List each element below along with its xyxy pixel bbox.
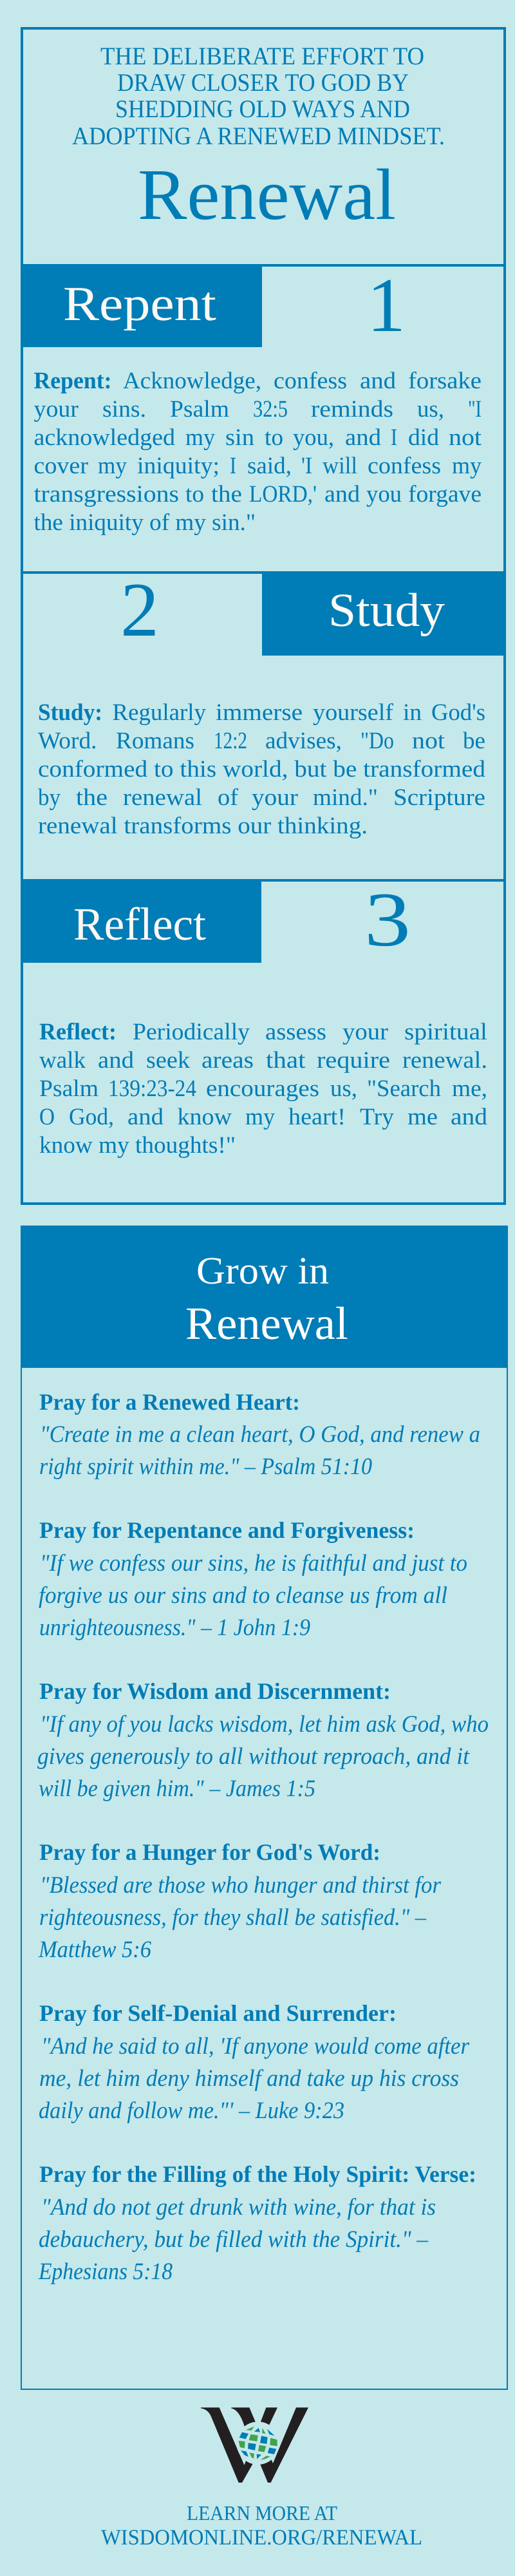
text block: study: in — [403, 699, 422, 726]
prayer: renewed heart: "Create in me a clean heart, O God, and renew a — [40, 1421, 480, 1448]
text block: study — [38, 699, 486, 839]
text block: repent: iniquity; — [137, 453, 220, 479]
prayer: filling of the holy spirit: "And do not get drunk with wine, for that is — [41, 2194, 436, 2221]
text block: reflect: Reflect: — [39, 1019, 117, 1045]
text block: study: immerse — [216, 699, 303, 726]
text block: repent: cover — [33, 453, 88, 479]
text block: study: your — [252, 784, 298, 811]
text block: study: not — [412, 728, 445, 754]
text block: reflect: me, — [452, 1075, 487, 1102]
text block: study: 12:2 — [214, 728, 247, 754]
text block: repent: forsake — [408, 368, 482, 394]
text block: repent: my — [98, 453, 127, 479]
text block: reflect: know my thoughts!" — [39, 1132, 236, 1159]
text block: reflect: us, — [330, 1075, 357, 1102]
text block: reflect — [39, 1019, 488, 1159]
text block: study: the — [76, 784, 108, 811]
text block: repent: confess — [368, 453, 441, 479]
text block: study: "Do — [360, 728, 394, 754]
prayer: self-denial and surrender: "And he said to all, 'If anyone would come after — [41, 2033, 470, 2060]
prayer: wisdom and discernment: "If any of you lacks wisdom, let him ask God, who — [40, 1711, 489, 1738]
text block: repent: said, — [247, 453, 292, 479]
step 1 header — [21, 262, 503, 348]
text block: repent: and — [324, 481, 360, 507]
text block: study: renewal transforms our thinking. — [38, 813, 368, 839]
step 1 header: 1 — [367, 262, 406, 348]
text block: reflect: walk — [39, 1047, 86, 1074]
prayer: hunger for god's word: Pray for a Hunger for God's Word: — [39, 1839, 380, 1865]
text block: study: Regularly — [112, 699, 206, 726]
heading: definition — [72, 43, 445, 150]
text block: study: conformed to this world, but be transformed — [38, 756, 486, 782]
text block: reflect: know — [178, 1104, 232, 1130]
text block: study: yourself — [313, 699, 394, 726]
step 3 header: 3 — [364, 876, 411, 962]
text block: repent: did — [408, 424, 440, 451]
text block: study: Scripture — [393, 784, 485, 811]
text block: repent: sin — [225, 424, 254, 451]
text block: repent: reminds — [311, 396, 393, 422]
prayer: wisdom and discernment: will be given him." – James 1:5 — [39, 1776, 315, 1802]
footer call to action: LEARN MORE AT — [187, 2501, 337, 2524]
prayer: hunger for god's word: Matthew 5:6 — [38, 1937, 151, 1963]
text block: repent: forgave — [408, 481, 482, 507]
text block: study: Study: — [38, 699, 102, 726]
step 3 header — [21, 876, 503, 963]
text block: study: mind." — [313, 784, 378, 811]
text block: reflect: Psalm — [39, 1075, 98, 1102]
text block: repent: to — [185, 481, 204, 507]
text block: repent: to — [265, 424, 283, 451]
text block: repent — [33, 368, 482, 536]
text block: study: renewal — [123, 784, 202, 811]
prayer: hunger for god's word: righteousness, for they shall be satisfied." – — [39, 1904, 426, 1931]
text block: repent: confess — [274, 368, 347, 394]
text block: repent: will — [323, 453, 357, 479]
panel: grow in renewal — [21, 1226, 508, 2389]
text block: repent: Acknowledge, — [123, 368, 261, 394]
prayer: repentance and forgiveness — [39, 1517, 467, 1641]
prayer: hunger for god's word: "Blessed are those who hunger and thirst for — [40, 1872, 442, 1899]
text block: study: Romans — [116, 728, 194, 754]
step 2 header — [23, 567, 503, 656]
text block: repent: transgressions — [33, 481, 179, 507]
prayer: repentance and forgiveness: "If we confess our sins, he is faithful and just to — [40, 1550, 467, 1577]
prayer: filling of the holy spirit: debauchery, but be filled with the Spirit." – — [39, 2226, 428, 2253]
text block: repent: I — [391, 424, 397, 451]
prayer: renewed heart: right spirit within me." – Psalm 51:10 — [39, 1454, 372, 1480]
text block: reflect: O — [39, 1104, 55, 1130]
text block: reflect: spiritual — [404, 1019, 487, 1045]
prayer: renewed heart — [39, 1389, 480, 1480]
prayer: repentance and forgiveness: unrighteousness." – 1 John 1:9 — [39, 1615, 310, 1641]
panel header: Renewal — [185, 1298, 348, 1349]
step 1 header: Repent — [63, 277, 216, 331]
prayer: filling of the holy spirit — [38, 2161, 476, 2285]
text block: repent: you — [366, 481, 402, 507]
step 2 header: 2 — [120, 567, 159, 652]
prayer: self-denial and surrender: Pray for Self-Denial and Surrender: — [39, 2000, 397, 2026]
text block: reflect: renewal. — [402, 1047, 487, 1074]
text block: repent: us, — [417, 396, 444, 422]
text block: reflect: "Search — [367, 1075, 441, 1102]
text block: study: advises, — [265, 728, 342, 754]
icon: wisdom online globe logo — [201, 2407, 308, 2483]
text block: study: by — [38, 784, 61, 811]
text block: reflect: and — [98, 1047, 135, 1074]
text block: repent: my — [185, 424, 215, 451]
text block: repent: 'I — [301, 453, 312, 479]
text block: repent: "I — [468, 396, 482, 422]
prayer: hunger for god's word — [38, 1839, 442, 1963]
panel header: Grow in — [196, 1249, 329, 1292]
text block: reflect: and — [127, 1104, 164, 1130]
text block: repent: not — [449, 424, 482, 451]
text block: repent: LORD,' — [249, 481, 317, 507]
text block: reflect: my — [245, 1104, 275, 1130]
title: Renewal — [138, 155, 396, 235]
text block: reflect: your — [342, 1019, 388, 1045]
text block: study: Word. — [38, 728, 97, 754]
text block: repent: my — [452, 453, 482, 479]
prayer: renewed heart: Pray for a Renewed Heart: — [39, 1389, 300, 1415]
panel: renewal steps — [21, 28, 505, 1204]
text block: repent: acknowledged — [33, 424, 175, 451]
text block: reflect: Periodically — [133, 1019, 250, 1045]
prayer: wisdom and discernment: Pray for Wisdom and Discernment: — [39, 1678, 391, 1704]
prayer: repentance and forgiveness: Pray for Repentance and Forgiveness: — [39, 1517, 415, 1543]
text block: study: God's — [431, 699, 485, 726]
text block: repent: the iniquity of my sin." — [33, 509, 256, 536]
heading: definition: SHEDDING OLD WAYS AND — [115, 95, 410, 123]
text block: repent: the — [211, 481, 242, 507]
text block: reflect: me — [407, 1104, 438, 1130]
text block: repent: and — [360, 368, 397, 394]
step 2 header: Study — [328, 584, 445, 637]
step 3 header: Reflect — [73, 898, 206, 950]
text block: study: be — [463, 728, 485, 754]
text block: reflect: seek — [146, 1047, 191, 1074]
prayer: self-denial and surrender: daily and follow me."' – Luke 9:23 — [39, 2098, 344, 2124]
text block: reflect: heart! — [288, 1104, 346, 1130]
prayer: wisdom and discernment: gives generously to all without reproach, and it — [37, 1743, 471, 1770]
prayer: self-denial and surrender — [39, 2000, 470, 2124]
text block: repent: Repent: — [33, 368, 112, 394]
text block: repent: Psalm — [170, 396, 229, 422]
panel header — [21, 1226, 508, 1368]
text block: reflect: require — [317, 1047, 390, 1074]
prayer: filling of the holy spirit: Pray for the Filling of the Holy Spirit: Verse: — [39, 2161, 476, 2187]
text block: reflect: assess — [265, 1019, 326, 1045]
text block: repent: I — [230, 453, 236, 479]
text block: reflect: that — [266, 1047, 306, 1074]
text block: reflect: God, — [69, 1104, 114, 1130]
text block: reflect: encourages — [206, 1075, 319, 1102]
footer call to action — [101, 2501, 422, 2550]
text block: reflect: Try — [360, 1104, 395, 1130]
heading: definition: THE DELIBERATE EFFORT TO — [100, 43, 424, 70]
text block: reflect: areas — [201, 1047, 254, 1074]
text block: reflect: and — [451, 1104, 488, 1130]
text block: reflect: 139:23-24 — [108, 1075, 196, 1102]
prayer: repentance and forgiveness: forgive us our sins and to cleanse us from all — [39, 1582, 447, 1609]
text block: study: of — [218, 784, 239, 811]
text block: repent: you, — [293, 424, 334, 451]
text block: repent: 32:5 — [253, 396, 288, 422]
text block: repent: and — [345, 424, 382, 451]
heading: definition: DRAW CLOSER TO GOD BY — [117, 69, 409, 97]
text block: repent: your — [33, 396, 79, 422]
heading: definition: ADOPTING A RENEWED MINDSET. — [72, 122, 445, 150]
footer call to action: WISDOMONLINE.ORG/RENEWAL — [101, 2526, 422, 2550]
text block: repent: sins. — [102, 396, 146, 422]
prayer: wisdom and discernment — [37, 1678, 489, 1802]
prayer: self-denial and surrender: me, let him deny himself and take up his cross — [39, 2065, 459, 2092]
prayer: filling of the holy spirit: Ephesians 5:18 — [38, 2259, 173, 2285]
